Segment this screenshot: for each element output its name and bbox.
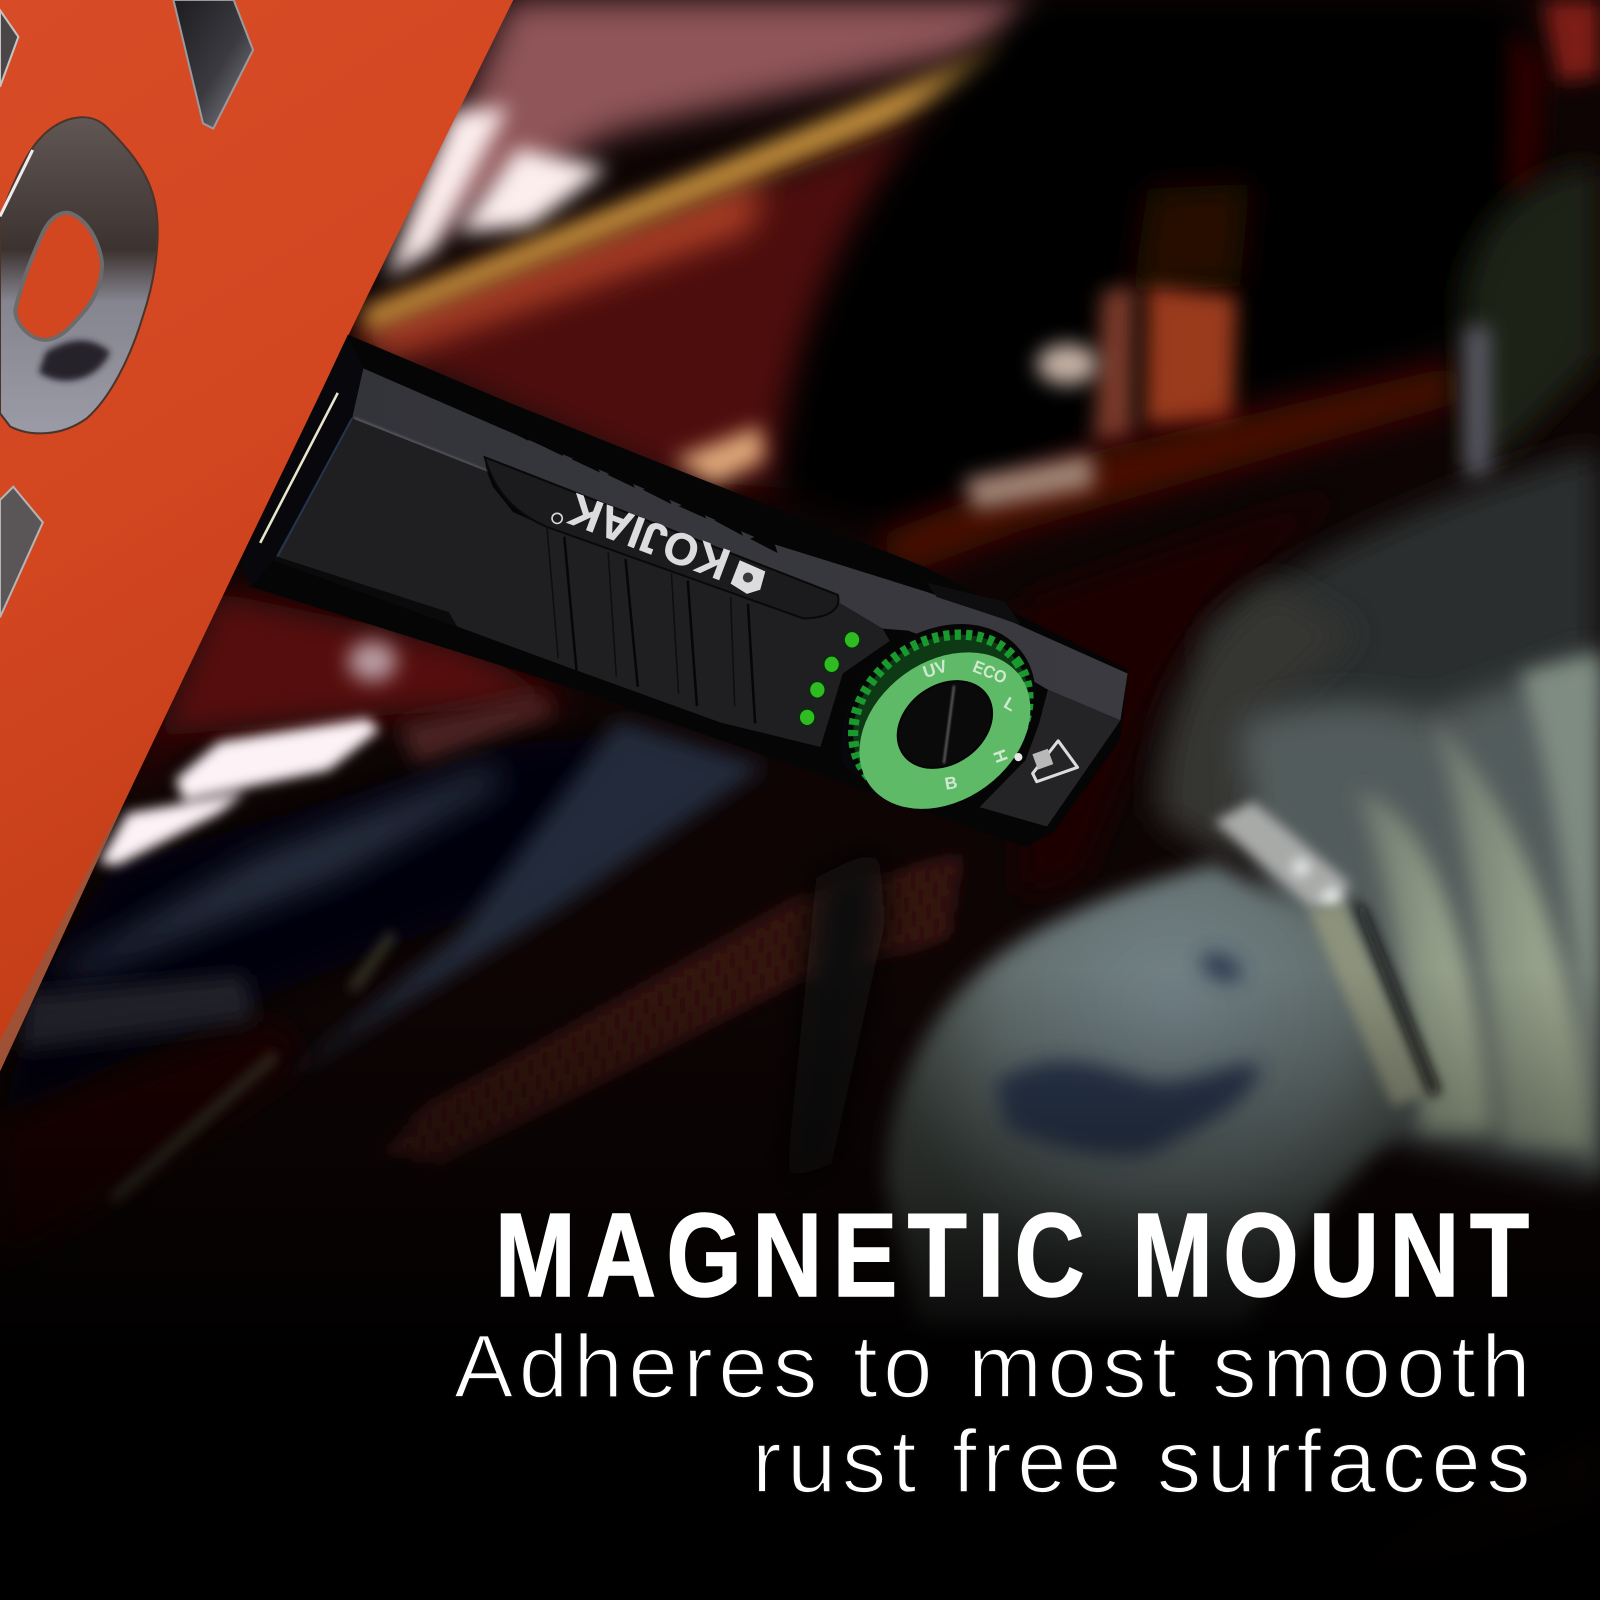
dial: mode labels: UV [920, 655, 950, 682]
flashlight: logo wordmark: KOJIAK [562, 484, 736, 590]
dial: black knurl [812, 588, 1070, 837]
dial: green ring [829, 620, 1061, 841]
background: lit rib sections [1357, 653, 1600, 1173]
background: red top right corner [1543, 0, 1600, 82]
flashlight: top face edge highlight [354, 418, 487, 471]
flashlight: lens highlight [260, 393, 338, 543]
panel: worn grey edge [0, 806, 122, 1071]
dial: mode labels: L [1001, 693, 1020, 715]
flashlight: knurl teeth [500, 420, 778, 553]
dial: mode labels: H [989, 747, 1012, 765]
dial: button glint [944, 686, 954, 763]
orange metal panel [0, 0, 513, 1071]
flashlight: lens end [241, 335, 363, 587]
background: muted pink-brown strip [398, 694, 556, 770]
dial: button [881, 663, 1009, 786]
background: dark red above block [1133, 184, 1250, 291]
panel: chrome lower letter [0, 487, 43, 617]
flashlight: o-ring recess [842, 653, 902, 778]
background: coil [20, 974, 255, 1051]
background: gap behind clamp [1352, 898, 1441, 1097]
subtitle line 2: rust free surfaces [752, 1412, 1531, 1511]
flashlight: rotary dial [812, 588, 1070, 841]
dial: mode labels: B [943, 772, 959, 794]
title: MAGNETIC MOUNT [495, 1189, 1529, 1321]
background: dark red below stripe [1020, 490, 1347, 898]
panel: chrome dark reflection [39, 341, 110, 381]
background: white pink streaks [99, 718, 380, 865]
background: blue grey diagonal band [281, 720, 765, 1084]
flashlight: tail panel [980, 690, 1120, 827]
background: dark area left [0, 735, 612, 1122]
background: olive housing rim [1158, 582, 1357, 867]
background: hose clamp band [1308, 903, 1434, 1107]
flashlight: shadow silhouette [241, 335, 1128, 847]
flashlight: status LEDs [799, 631, 860, 726]
dial: green teeth [821, 601, 1061, 832]
panel: chrome left highlight [0, 150, 33, 216]
flashlight: triangle crown [1032, 749, 1053, 770]
flashlight: indicator dot [1014, 753, 1022, 761]
background: orange red block [1145, 286, 1237, 427]
flashlight: grey top face [352, 368, 1128, 720]
background: dark upper housing [1204, 449, 1600, 776]
background: dim dark column [786, 847, 886, 1184]
flashlight: registered mark [552, 513, 562, 523]
flashlight: side switch [927, 583, 1020, 624]
bottom fade to black [0, 969, 1600, 1600]
background: hose clamp head [1214, 801, 1349, 913]
background: red under flashlight left [128, 592, 571, 806]
dial: mode labels: ECO [970, 656, 1010, 688]
background: red mesh [383, 852, 964, 1163]
panel: oval hole [15, 213, 102, 340]
background: red stripe right [878, 365, 1457, 577]
panel: chrome letter top [173, 0, 253, 129]
background: pink upper wall [408, 0, 1031, 245]
background: salmon lit band [362, 179, 765, 359]
background: white highlights [386, 107, 607, 278]
background: dark red chassis panel [352, 87, 1020, 490]
flashlight: front face [273, 418, 890, 747]
flashlight: pocket clip [485, 457, 838, 618]
background: yellow stripe [362, 43, 1010, 332]
flashlight: body grooves [547, 527, 755, 723]
background: pink spot [348, 641, 397, 682]
background: dark red strip right [1505, 31, 1546, 194]
background: pink red block side [1094, 286, 1135, 444]
panel: chrome top-left sliver [0, 10, 18, 87]
panel: chrome oval letter [0, 117, 158, 433]
flashlight: triangle mark [1032, 741, 1078, 782]
subtitle [454, 1317, 1531, 1511]
background: dark tube highlight [61, 765, 505, 980]
background: lower right red stripe [1265, 1439, 1600, 1600]
background: grey column [1465, 327, 1490, 478]
flashlight [241, 335, 1128, 847]
flashlight: logo mark [731, 560, 765, 594]
flashlight: lower lip [273, 556, 457, 627]
background: grey blue housing shoulder [1240, 653, 1600, 1184]
background: olive thin diagonals [112, 934, 393, 1200]
subtitle line 1: Adheres to most smooth [454, 1317, 1531, 1416]
flashlight: blue inner edge [276, 418, 352, 560]
background: black machinery top right [776, 0, 1547, 531]
background: dark red floor left [0, 1020, 306, 1265]
background: lower hose [886, 863, 1413, 1327]
background: bright spots behind flashlight [673, 344, 1098, 510]
background: blue stains on hose [995, 947, 1261, 1156]
dial: mode labels [920, 655, 1020, 794]
background: olive bracket far right [1461, 163, 1600, 469]
